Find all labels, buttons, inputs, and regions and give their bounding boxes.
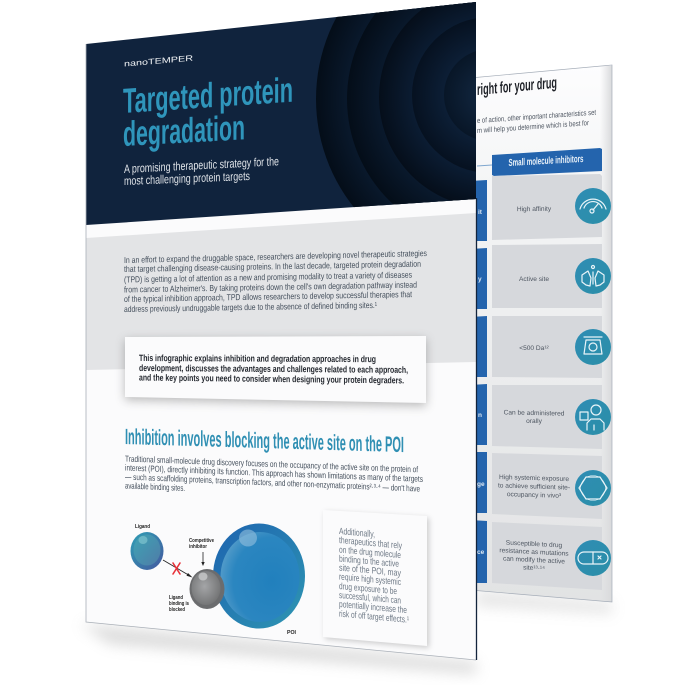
intro paragraph: of the typical inhibition approach, TPD allows researchers to develop successful therapies that — [124, 289, 412, 304]
row 4: oral administration: Can be administered — [504, 409, 565, 418]
front page shadow — [80, 624, 476, 674]
icon: hands around target — [582, 266, 604, 286]
intro paragraph: (TPD) is getting a lot of attention as a new and promising modality to treat a variety of diseases — [124, 270, 412, 284]
row 5: systemic exposure — [492, 453, 611, 519]
side note shadow — [325, 512, 429, 648]
side note panel: therapeutics that rely — [339, 535, 402, 551]
side note panel: on the drug molecule — [339, 545, 401, 560]
row 2: active site — [492, 244, 611, 308]
row 6: drug resistance: site¹³·¹⁴ — [523, 564, 545, 573]
row 1: high affinity: High affinity — [517, 206, 552, 213]
row 6: drug resistance: can modify the active — [503, 555, 565, 566]
callout: infographic purpose: This infographic explains inhibition and degradation approaches in drug — [139, 353, 376, 364]
row 5: systemic exposure: High systemic exposure — [499, 474, 569, 483]
column header: small molecule inhibitors: Small molecule inhibitors — [508, 154, 584, 169]
back page intro text: m will help you determine which is best for — [477, 118, 589, 135]
side note panel: successful, which can — [339, 590, 401, 606]
row 6: drug resistance: Susceptible to drug — [506, 540, 563, 549]
label: competitive inhibitor: Competitive — [189, 538, 214, 544]
icon: scale — [584, 337, 602, 354]
side note panel: binding to the active — [339, 554, 399, 569]
side note panel: require high systemic — [339, 572, 401, 587]
section paragraph: Traditional small-molecule drug discovery focuses on the occupancy of the active site on the protein of — [125, 454, 418, 474]
back page intro text: e of action, other important characteristics set — [477, 108, 596, 125]
side note panel: site of the POI, may — [339, 563, 401, 578]
icon: hexagon — [579, 476, 607, 500]
row labels column: ce — [477, 549, 485, 556]
back page heading: right for your drug — [477, 74, 557, 99]
side note panel: Additionally, — [339, 526, 375, 539]
intro paragraph: that target challenging disease-causing proteins. In the last decade, targeted protein degradation — [124, 259, 421, 274]
label: ligand binding is blocked: Ligand — [169, 595, 183, 601]
panel: front page — [86, 2, 478, 660]
title: degradation — [123, 108, 245, 154]
arrow: inhibitor pointer — [201, 552, 205, 566]
back page intro text — [477, 108, 596, 135]
callout shadow — [125, 339, 426, 406]
label: ligand binding is blocked: blocked — [169, 607, 185, 613]
row 6: drug resistance — [492, 522, 611, 590]
section paragraph: available binding sites. — [125, 481, 185, 493]
section paragraph: interest (POI), directly inhibiting its function. This approach has shown limitations as many of the targets — [125, 463, 423, 484]
concentric ring decoration — [316, 2, 476, 208]
panel: grey intro band — [86, 213, 476, 370]
row labels column: it — [478, 209, 483, 216]
row 4: oral administration: orally — [526, 418, 543, 425]
label: ligand binding is blocked: binding is — [169, 601, 189, 607]
intro paragraph: address previously undruggable targets due to the absence of defined binding sites.¹ — [124, 300, 377, 314]
callout: infographic purpose: development, discusses the advantages and challenges related to each approach, — [139, 363, 408, 375]
competitive inhibitor sphere — [190, 569, 224, 609]
label: competitive inhibitor: inhibitor — [189, 544, 208, 550]
logo: NanoTemper: nanoTEMPER — [124, 54, 193, 68]
subtitle: most challenging protein targets — [124, 169, 250, 188]
side note panel: potentially increase the — [339, 599, 407, 615]
label: competitive inhibitor — [189, 538, 214, 550]
subtitle — [124, 154, 279, 188]
row 3: molecular weight: <500 Da¹² — [519, 345, 550, 352]
panel: back page comparison table — [470, 65, 612, 602]
section heading: Inhibition involves blocking the active site on the POI — [125, 424, 404, 457]
POI sphere — [213, 524, 305, 628]
icon: red cross — [173, 563, 180, 574]
row labels column: y — [478, 276, 482, 283]
row 5: systemic exposure: occupancy in vivo³ — [507, 491, 562, 500]
column header: small molecule inhibitors — [492, 148, 602, 176]
row labels column: ge — [477, 481, 485, 488]
back page shadow — [476, 590, 612, 614]
row 5: systemic exposure: to achieve sufficient site- — [498, 482, 570, 492]
row 3: molecular weight — [492, 316, 611, 378]
row 1: high affinity — [492, 174, 611, 240]
ligand sphere — [130, 532, 164, 570]
callout: infographic purpose — [125, 336, 426, 403]
side note panel: drug exposure to be — [339, 581, 397, 596]
row 6: drug resistance: resistance as mutations — [499, 547, 569, 558]
row 4: oral administration — [492, 385, 611, 449]
section paragraph: — such as scaffolding proteins, transcription factors, and other non-enzymatic proteins²·³·⁴ — don't have — [125, 472, 420, 494]
diagram: competitive inhibition — [130, 524, 305, 636]
icon: gauge — [580, 199, 606, 213]
intro paragraph: from cancer to Alzheimer's. By taking proteins down the cell's own degradation pathway instead — [124, 280, 417, 294]
label: ligand: Ligand — [135, 524, 150, 530]
arrow: ligand to binding site — [163, 560, 192, 578]
intro paragraph — [124, 248, 427, 314]
label: POI: POI — [287, 630, 296, 636]
row 2: active site: Active site — [519, 276, 549, 283]
side note panel: risk of off target effects.¹ — [339, 609, 409, 625]
icon: capsule — [578, 552, 608, 564]
icon: person with pill — [580, 405, 604, 430]
side note panel — [323, 510, 427, 646]
subtitle: A promising therapeutic strategy for the — [124, 154, 279, 176]
label: ligand binding is blocked — [169, 595, 189, 613]
row labels column: n — [478, 412, 482, 419]
panel: navy header — [86, 2, 476, 225]
row labels column — [470, 180, 487, 583]
callout: infographic purpose: and the key points you need to consider when designing your protein degraders. — [139, 373, 404, 385]
intro paragraph: In an effort to expand the druggable space, researchers are developing novel therapeutic strategies — [124, 248, 427, 265]
title: Targeted protein — [123, 71, 293, 121]
section paragraph — [125, 454, 423, 494]
title — [123, 71, 293, 154]
